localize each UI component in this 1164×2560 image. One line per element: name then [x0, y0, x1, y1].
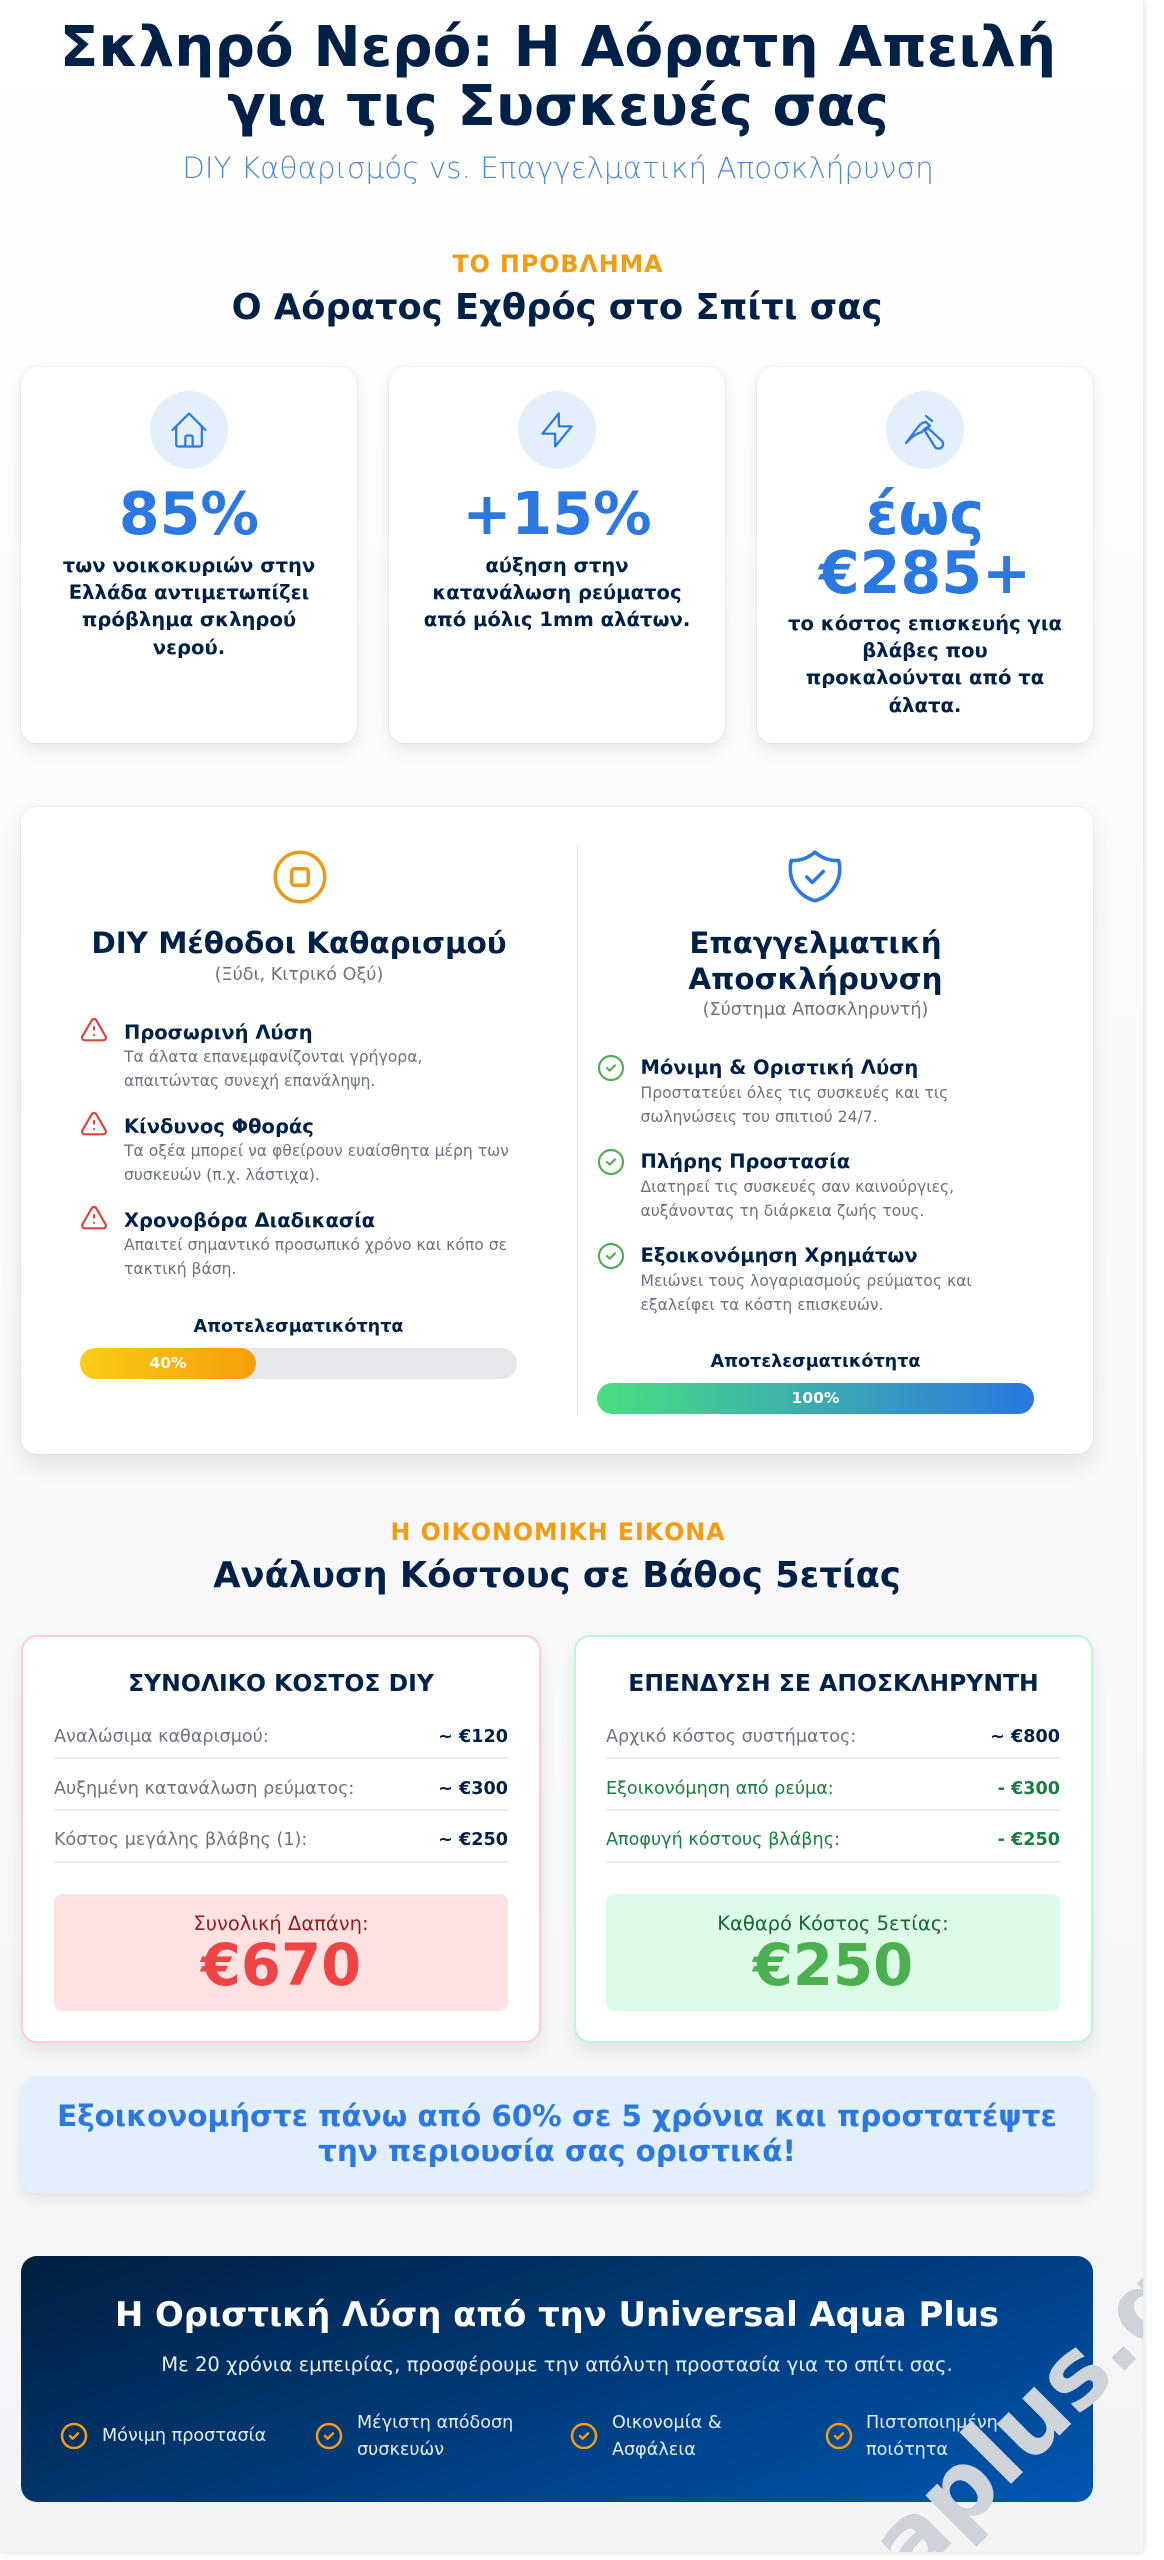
heading: DIY methods: DIY Μέθοδοι Καθαρισμού — [91, 926, 507, 960]
section label: financial picture: Η ΟΙΚΟΝΟΜΙΚΗ ΕΙΚΟΝΑ — [391, 1518, 725, 1546]
row: major failure: ~ €250 — [438, 1830, 508, 1850]
text: stat €285 description: προκαλούνται από τα — [806, 666, 1044, 689]
bar chart: softener effectiveness 100%: 100% — [792, 1389, 839, 1407]
text: stat +15% description: κατανάλωση ρεύματος — [432, 581, 682, 604]
icon: benefit check 4 — [826, 2422, 852, 2450]
text: savings message — [57, 2099, 1057, 2168]
icon: benefit check 1 — [60, 2422, 88, 2450]
text: temporary solution description: απαιτώντας συνεχή επανάληψη. — [124, 1072, 375, 1090]
text: benefit 2: συσκευών — [357, 2440, 444, 2460]
icon: benefit check 3 — [570, 2422, 598, 2450]
heading: professional softening: Αποσκλήρυνση — [688, 962, 943, 996]
item: temporary solution: Προσωρινή Λύση — [124, 1021, 313, 1044]
text: stat 85% description: των νοικοκυριών στην — [63, 554, 315, 576]
heading: DIY total: ΣΥΝΟΛΙΚΟ ΚΟΣΤΟΣ DIY — [128, 1669, 434, 1697]
text: DIY subtitle: (Ξύδι, Κιτρικό Οξύ) — [215, 965, 383, 985]
panel: DIY total cost — [21, 1635, 541, 2043]
text: benefit 2 — [357, 2412, 513, 2460]
heading: final solution: Η Οριστική Λύση από την Universal Aqua Plus — [115, 2294, 999, 2334]
title — [60, 15, 1056, 138]
panel: stat 85% — [21, 367, 357, 743]
stat: €670: €670 — [201, 1932, 361, 1999]
row: avoided failure — [606, 1830, 1060, 1850]
text: permanent solution description — [640, 1084, 948, 1126]
panel: stat up to 285 — [757, 367, 1093, 743]
text: money savings description: εξαλείφει τα κόστη επισκευών. — [640, 1296, 884, 1314]
text: benefit 3: Ασφάλεια — [612, 2440, 696, 2460]
callout: savings message — [21, 2076, 1093, 2193]
item: full protection: Πλήρης Προστασία — [640, 1150, 850, 1173]
text: corrosion risk description — [124, 1142, 509, 1184]
row: avoided failure: - €250 — [998, 1830, 1060, 1850]
heading: professional softening: Επαγγελματική — [689, 926, 942, 960]
text: stat +15% description: αύξηση στην — [485, 554, 629, 576]
text: permanent solution description: σωληνώσεις του σπιτιού 24/7. — [640, 1108, 878, 1126]
text: corrosion risk description: Τα οξέα μπορεί να φθείρουν ευαίσθητα μέρη των — [124, 1142, 509, 1160]
text: time consuming description: Απαιτεί σημαντικό προσωπικό χρόνο και κόπο σε — [124, 1236, 507, 1254]
text: experience: Με 20 χρόνια εμπειρίας, προσφέρουμε την απόλυτη προστασία για το σπίτι σας. — [161, 2352, 953, 2376]
row: power savings: - €300 — [998, 1779, 1060, 1799]
text: stat €285 description — [788, 612, 1062, 717]
text: time consuming description — [124, 1236, 507, 1278]
text: time consuming description: τακτική βάση. — [124, 1260, 237, 1278]
text: professional subtitle: (Σύστημα Αποσκληρυντή) — [703, 1000, 928, 1020]
icon: check 3 — [598, 1242, 624, 1270]
callout: DIY total expense — [54, 1894, 508, 2011]
text: full protection description: αυξάνοντας τη διάρκεια ζωής τους. — [640, 1202, 924, 1220]
panel: stat +15% — [389, 367, 725, 743]
text: savings message: την περιουσία σας οριστικά! — [318, 2134, 796, 2168]
text: stat €285 description: το κόστος επισκευής για — [788, 612, 1062, 634]
row: increased power — [54, 1779, 508, 1799]
stat: +15%: +15% — [462, 480, 652, 548]
text: money savings description: Μειώνει τους λογαριασμούς ρεύματος και — [640, 1272, 972, 1290]
icon: check 1 — [598, 1054, 624, 1082]
icon: benefit check 2 — [316, 2422, 342, 2450]
row: increased power: ~ €300 — [438, 1779, 508, 1799]
icon: hammer — [886, 391, 964, 469]
heading: professional softening — [688, 926, 943, 996]
row: power savings — [606, 1779, 1060, 1799]
item: corrosion risk: Κίνδυνος Φθοράς — [124, 1115, 314, 1138]
text: benefit 2: Μέγιστη απόδοση — [357, 2412, 513, 2432]
text: stat 85% description: Ελλάδα αντιμετωπίζει — [69, 581, 309, 604]
icon: DIY stop circle — [273, 850, 327, 904]
section heading: the problem: Ο Αόρατος Εχθρός στο Σπίτι σας — [232, 287, 882, 328]
panel: softener investment — [574, 1635, 1093, 2043]
bar chart: DIY effectiveness 40%: 40% — [149, 1354, 187, 1372]
icon: lightning bolt — [518, 391, 596, 469]
icon: shield check — [788, 850, 842, 902]
icon: check 2 — [598, 1148, 624, 1176]
text: money savings description — [640, 1272, 972, 1314]
section label: the problem: ΤΟ ΠΡΟΒΛΗΜΑ — [452, 250, 663, 278]
text: savings message: Εξοικονομήστε πάνω από 60% σε 5 χρόνια και προστατέψτε — [57, 2099, 1057, 2133]
text: benefit 1: Μόνιμη προστασία — [102, 2426, 266, 2446]
stat: €250: €250 — [753, 1932, 913, 1999]
text: net cost label: Καθαρό Κόστος 5ετίας: — [717, 1912, 949, 1935]
text: benefit 3 — [612, 2412, 722, 2460]
text: stat 85% description: πρόβλημα σκληρού — [82, 608, 296, 631]
row: consumables: Αναλώσιμα καθαρισμού: — [54, 1727, 269, 1747]
text: benefit 4: Πιστοποιημένη — [866, 2412, 998, 2432]
row: major failure — [54, 1830, 508, 1850]
subtitle: DIY Καθαρισμός vs. Επαγγελματική Αποσκλήρυνση — [182, 151, 934, 185]
stat: up to €285+: έως — [866, 480, 984, 548]
row: power savings: Εξοικονόμηση από ρεύμα: — [606, 1779, 834, 1799]
text: stat €285 description: άλατα. — [889, 694, 961, 717]
bar chart: DIY effectiveness 40% — [80, 1348, 517, 1379]
row: avoided failure: Αποφυγή κόστους βλάβης: — [606, 1830, 840, 1850]
callout: net cost — [606, 1894, 1060, 2011]
title: Σκληρό Νερό: Η Αόρατη Απειλή — [60, 15, 1056, 80]
title: για τις Συσκευές σας — [227, 74, 889, 138]
item: permanent solution: Μόνιμη & Οριστική Λύση — [640, 1056, 918, 1079]
text: benefit 3: Οικονομία & — [612, 2412, 722, 2432]
text: stat 85% description — [63, 554, 315, 659]
label: softener effectiveness: Αποτελεσματικότητα — [710, 1352, 921, 1372]
text: full protection description: Διατηρεί τις συσκευές σαν καινούργιες, — [640, 1178, 954, 1196]
panel: comparison — [21, 807, 1093, 1454]
row: major failure: Κόστος μεγάλης βλάβης (1): — [54, 1830, 307, 1850]
label: DIY effectiveness: Αποτελεσματικότητα — [193, 1316, 404, 1336]
text: stat €285 description: βλάβες που — [862, 639, 988, 662]
text: stat 85% description: νερού. — [153, 636, 225, 659]
item: money savings: Εξοικονόμηση Χρημάτων — [640, 1244, 918, 1267]
heading: softener investment: ΕΠΕΝΔΥΣΗ ΣΕ ΑΠΟΣΚΛΗΡΥΝΤΗ — [628, 1669, 1039, 1697]
text: stat +15% description — [424, 554, 690, 631]
icon: warning 2 — [81, 1112, 107, 1136]
icon: house — [150, 391, 228, 469]
item: time consuming: Χρονοβόρα Διαδικασία — [124, 1209, 375, 1232]
text: benefit 4 — [866, 2412, 998, 2460]
row: initial cost — [606, 1727, 1060, 1747]
panel: call to action — [21, 2256, 1093, 2502]
text: temporary solution description: Τα άλατα επανεμφανίζονται γρήγορα, — [124, 1048, 422, 1066]
icon: warning 3 — [81, 1206, 107, 1230]
text: stat +15% description: από μόλις 1mm αλάτων. — [424, 608, 690, 631]
text: corrosion risk description: συσκευών (π.χ. λάστιχα). — [124, 1166, 320, 1184]
icon: warning 1 — [81, 1018, 107, 1042]
stat: 85%: 85% — [119, 480, 259, 548]
section heading: cost analysis: Ανάλυση Κόστους σε Βάθος 5ετίας — [213, 1555, 901, 1596]
row: consumables: ~ €120 — [438, 1727, 508, 1747]
text: permanent solution description: Προστατεύει όλες τις συσκευές και τις — [640, 1084, 948, 1102]
text: temporary solution description — [124, 1048, 422, 1090]
text: DIY total label: Συνολική Δαπάνη: — [193, 1912, 369, 1935]
row: initial cost: ~ €800 — [990, 1727, 1060, 1747]
row: increased power: Αυξημένη κατανάλωση ρεύματος: — [54, 1779, 354, 1799]
bar chart: softener effectiveness 100% — [597, 1383, 1034, 1414]
stat: up to €285+: €285+ — [819, 539, 1031, 607]
row: initial cost: Αρχικό κόστος συστήματος: — [606, 1727, 856, 1747]
row: consumables — [54, 1727, 508, 1747]
text: full protection description — [640, 1178, 954, 1220]
text: benefit 4: ποιότητα — [866, 2440, 948, 2460]
stat: up to €285+ — [818, 480, 1031, 607]
